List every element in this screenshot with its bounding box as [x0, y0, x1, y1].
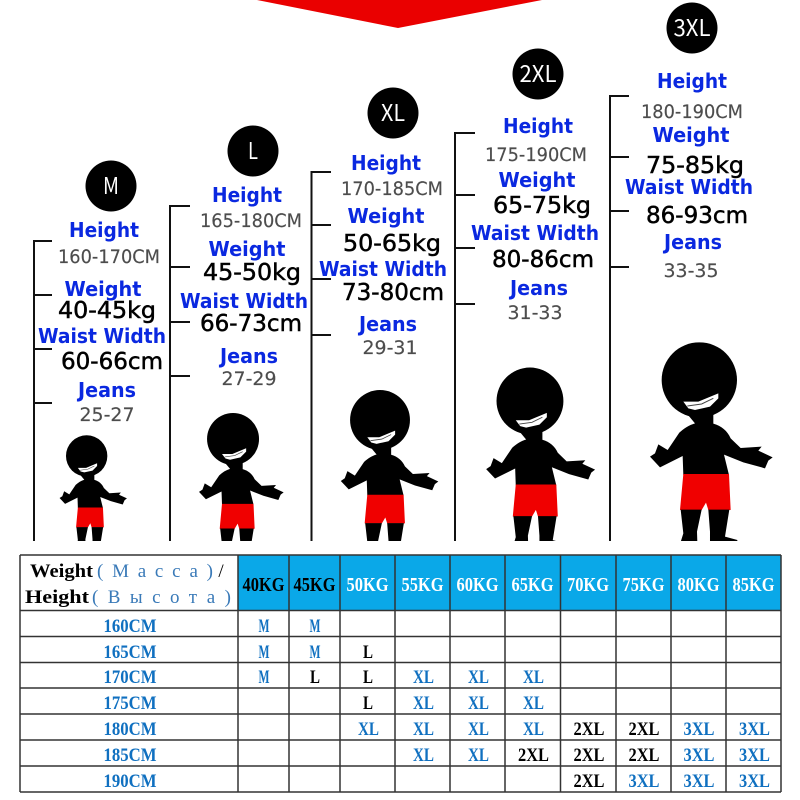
- figure: 3XL: [650, 342, 773, 542]
- size cells: XL: XL: [413, 667, 434, 688]
- weight column headers: 40KG: [242, 574, 285, 596]
- value: XL height: 170-185CM: [341, 179, 443, 200]
- weight column headers: 85KG: [732, 574, 775, 596]
- size cells: 3XL: 3XL: [628, 771, 660, 792]
- label: L jeans: Jeans: [218, 344, 278, 368]
- label: 3XL waist: Waist Width: [625, 175, 753, 199]
- size cells: 3XL: 3XL: [739, 745, 770, 766]
- badge: L: L: [248, 132, 258, 166]
- label: 2XL height: Height: [503, 114, 573, 138]
- value: 2XL height: 175-190CM: [485, 145, 587, 166]
- label: L height: Height: [212, 183, 282, 207]
- weight column headers: 65KG: [512, 574, 554, 596]
- value: 3XL height: 180-190CM: [641, 102, 743, 123]
- size cells: 2XL: 2XL: [574, 771, 604, 792]
- size cells: XL: [358, 667, 544, 766]
- size cells: M: [258, 616, 321, 688]
- size cells: XL: XL: [468, 719, 489, 740]
- size cells: 2XL: 2XL: [628, 719, 660, 740]
- value: XL jeans: 29-31: [362, 338, 418, 359]
- size cells: XL: XL: [523, 719, 544, 740]
- size cells: 3XL: 3XL: [739, 719, 770, 740]
- label: XL weight: Weight: [348, 204, 425, 228]
- value: M height: 160-170CM: [58, 247, 160, 268]
- value: 3XL weight: 75-85kg: [646, 153, 744, 179]
- weight column headers: 55KG: [402, 574, 444, 596]
- weight column headers: [242, 574, 775, 596]
- label: M weight: Weight: [64, 277, 142, 301]
- header corner label: (Высота): [92, 587, 231, 608]
- value: L jeans: 27-29: [222, 369, 276, 390]
- height row labels: 160CM: [104, 616, 157, 637]
- label: 2XL weight: Weight: [498, 168, 576, 192]
- weight column headers: 75KG: [622, 574, 665, 596]
- table header background: [238, 555, 781, 610]
- figure: M: [60, 435, 127, 545]
- figure: XL: [341, 390, 438, 549]
- label: 3XL weight: Weight: [652, 123, 730, 147]
- table grid: [20, 555, 781, 792]
- label: M height: Height: [69, 218, 139, 242]
- header corner label: [25, 561, 231, 608]
- label: 2XL waist: Waist Width: [471, 221, 599, 245]
- size cells: XL: XL: [413, 719, 434, 740]
- value: L waist: 66-73cm: [200, 311, 302, 337]
- size cells: M: M: [258, 642, 270, 663]
- size cells: M: M: [258, 616, 270, 637]
- height row labels: [104, 616, 157, 792]
- badge: 2XL: [512, 48, 564, 100]
- value: 3XL jeans: 33-35: [664, 261, 718, 282]
- size cells: L: L: [363, 667, 373, 688]
- size cells: XL: XL: [358, 719, 379, 740]
- size cells: 3XL: 3XL: [684, 719, 714, 740]
- value: M jeans: 25-27: [80, 405, 134, 426]
- header corner label: Height: [25, 587, 90, 608]
- figure: L: [199, 413, 284, 551]
- size cells: 3XL: 3XL: [684, 771, 714, 792]
- height row labels: 170CM: [104, 667, 157, 688]
- label: XL waist: Waist Width: [319, 257, 447, 281]
- size cells: 3XL: 3XL: [739, 771, 770, 792]
- size cells: XL: XL: [523, 693, 544, 714]
- value: 2XL waist: 80-86cm: [492, 247, 594, 273]
- weight column headers: 45KG: [294, 574, 336, 596]
- figure: 2XL: [486, 368, 595, 545]
- value: M weight: 40-45kg: [58, 298, 156, 324]
- height row labels: 190CM: [104, 771, 157, 792]
- bracket: 3XL: [610, 96, 629, 541]
- size table: [20, 555, 781, 792]
- badge: M: M: [103, 167, 119, 201]
- label: 2XL jeans: Jeans: [508, 276, 568, 300]
- size cells: L: L: [363, 693, 373, 714]
- size cells: 2XL: 2XL: [574, 719, 604, 740]
- height row labels: 175CM: [104, 693, 157, 714]
- label: XL jeans: Jeans: [357, 312, 417, 336]
- size cells: M: M: [310, 616, 321, 637]
- size panel: 2XL: [455, 48, 599, 545]
- weight column headers: 50KG: [346, 574, 389, 596]
- label: M waist: Waist Width: [38, 324, 166, 348]
- size cells: 3XL: [628, 719, 770, 792]
- weight column headers: 60KG: [456, 574, 499, 596]
- size cells: XL: XL: [523, 667, 544, 688]
- value: 2XL jeans: 31-33: [508, 303, 562, 324]
- bracket: M: [34, 241, 52, 541]
- size panel: XL: [312, 88, 447, 549]
- header corner label: /: [218, 561, 224, 582]
- size cells: XL: XL: [468, 667, 489, 688]
- value: XL weight: 50-65kg: [343, 231, 441, 257]
- bracket: 2XL: [455, 133, 475, 541]
- size cells: 2XL: 2XL: [574, 745, 604, 766]
- label: XL height: Height: [351, 151, 421, 175]
- size cells: L: L: [363, 642, 373, 663]
- red banner: [257, 0, 542, 28]
- bracket: L: [170, 206, 190, 541]
- value: M waist: 60-66cm: [61, 349, 163, 375]
- value: XL waist: 73-80cm: [342, 280, 444, 306]
- badge: L: [228, 126, 278, 176]
- size cells: 3XL: 3XL: [684, 745, 714, 766]
- value: 3XL waist: 86-93cm: [646, 203, 748, 229]
- badge: M: [86, 160, 136, 212]
- header corner label: Weight: [30, 561, 94, 582]
- value: 2XL weight: 65-75kg: [493, 193, 591, 219]
- badge: XL: [368, 88, 418, 138]
- badge: 3XL: 3XL: [674, 9, 710, 43]
- badge: 2XL: 2XL: [520, 55, 556, 89]
- size cells: XL: XL: [468, 745, 489, 766]
- value: L height: 165-180CM: [200, 211, 302, 232]
- label: L waist: Waist Width: [180, 289, 308, 313]
- size cells: L: L: [310, 667, 320, 688]
- size cells: 2XL: [518, 719, 660, 792]
- size cells: XL: XL: [413, 745, 434, 766]
- bracket: XL: [312, 172, 331, 541]
- badge: 3XL: [666, 2, 718, 54]
- size panel: 3XL: [610, 2, 773, 542]
- size panel: M: [34, 160, 166, 545]
- label: L weight: Weight: [208, 237, 286, 261]
- height row labels: 180CM: [104, 719, 157, 740]
- size cells: XL: XL: [413, 693, 434, 714]
- value: L weight: 45-50kg: [203, 260, 301, 286]
- height row labels: 185CM: [104, 745, 157, 766]
- size cells: 2XL: 2XL: [518, 745, 549, 766]
- size cells: M: M: [258, 667, 270, 688]
- label: M jeans: Jeans: [76, 378, 136, 402]
- size panel: L: [170, 126, 308, 551]
- height row labels: 165CM: [104, 642, 157, 663]
- size cells: 2XL: 2XL: [628, 745, 660, 766]
- label: 3XL height: Height: [657, 69, 727, 93]
- size cells: L: [310, 642, 373, 714]
- size cells: XL: XL: [468, 693, 489, 714]
- label: 3XL jeans: Jeans: [662, 230, 722, 254]
- badge: XL: XL: [381, 94, 405, 128]
- weight column headers: 70KG: [567, 574, 609, 596]
- header corner label: (Масса): [97, 561, 213, 582]
- weight column headers: 80KG: [678, 574, 720, 596]
- size cells: M: M: [310, 642, 321, 663]
